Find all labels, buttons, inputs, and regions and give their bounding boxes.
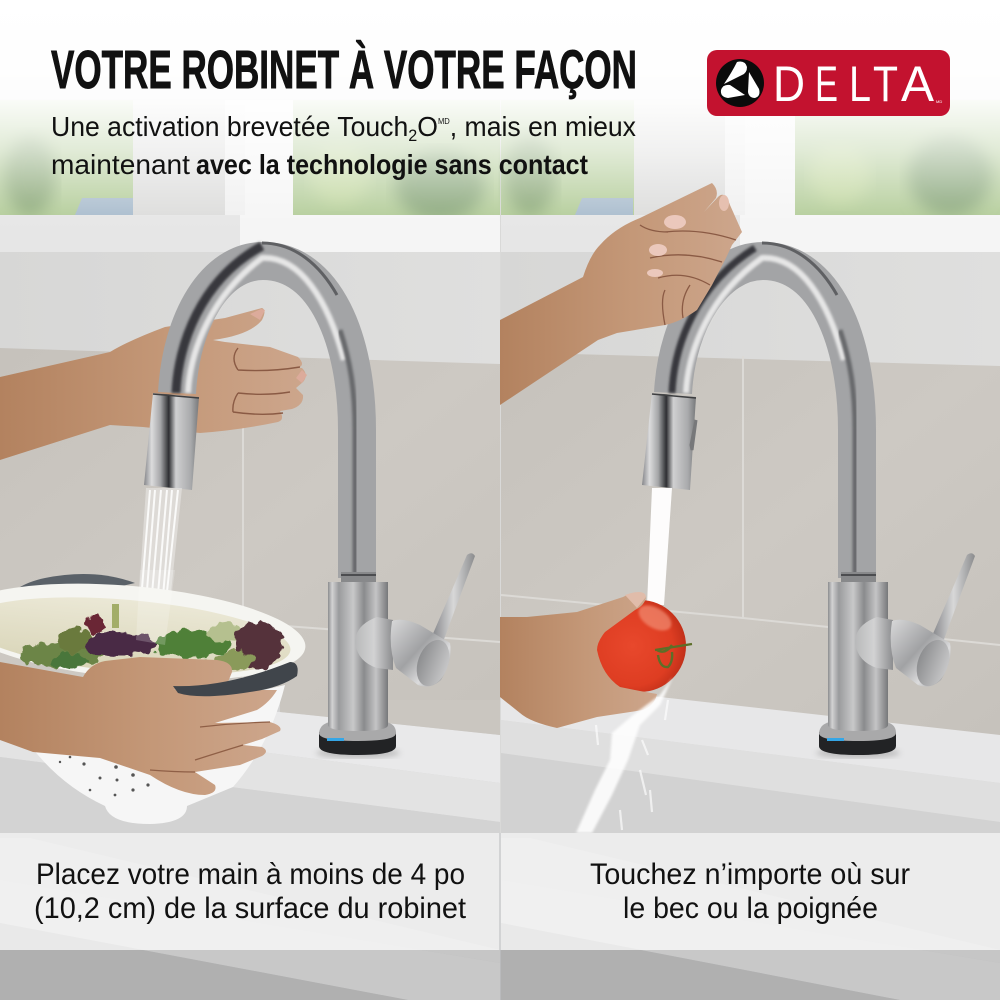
caption band: left: [0, 833, 500, 950]
left hand above the faucet: [0, 308, 307, 460]
subtitle: Une activation brevetée Touch: [51, 111, 427, 142]
faucet: right: [642, 243, 975, 758]
caption band: left: (10,2 cm) de la surface du robinet: [34, 892, 467, 925]
subtitle: avec la technologie sans contact: [196, 149, 588, 180]
caption band: left: Placez votre main à moins de 4 po: [36, 858, 465, 891]
faucet: left: [144, 243, 475, 758]
caption band: right: [500, 833, 1000, 950]
logo: Delta: MD: [936, 99, 942, 104]
logo: Delta: [707, 50, 950, 116]
logo: Delta: T: [873, 56, 898, 112]
tomato held in right hand: [500, 592, 692, 728]
top white fade: [0, 0, 1000, 232]
caption band: right: Touchez n’importe où sur: [590, 858, 910, 891]
subtitle: maintenant: [51, 149, 190, 180]
subtitle: , mais en mieux: [450, 111, 636, 142]
subtitle: 2: [408, 126, 417, 145]
subtitle: MD: [438, 117, 450, 126]
subtitle: O: [417, 111, 438, 142]
logo: Delta: E: [815, 56, 838, 112]
panel: left kitchen scene: [0, 0, 500, 1000]
caption band: right: le bec ou la poignée: [623, 892, 878, 925]
logo: Delta: D: [773, 56, 805, 112]
water splash under tomato: [576, 677, 673, 833]
floor of counter behind caption bands: [0, 833, 1000, 1000]
water stream: right: [647, 488, 672, 605]
water stream: left: [136, 488, 182, 640]
right hand above the faucet: [500, 183, 742, 405]
panel: right kitchen scene: [500, 0, 1000, 1000]
title: VOTRE ROBINET À VOTRE FAÇON: [51, 40, 637, 100]
left hand holding the colander: [0, 657, 298, 795]
logo: Delta: A: [901, 56, 935, 112]
colander with salad: [0, 570, 309, 824]
logo: Delta: L: [849, 56, 871, 112]
subtitle: [51, 111, 636, 180]
